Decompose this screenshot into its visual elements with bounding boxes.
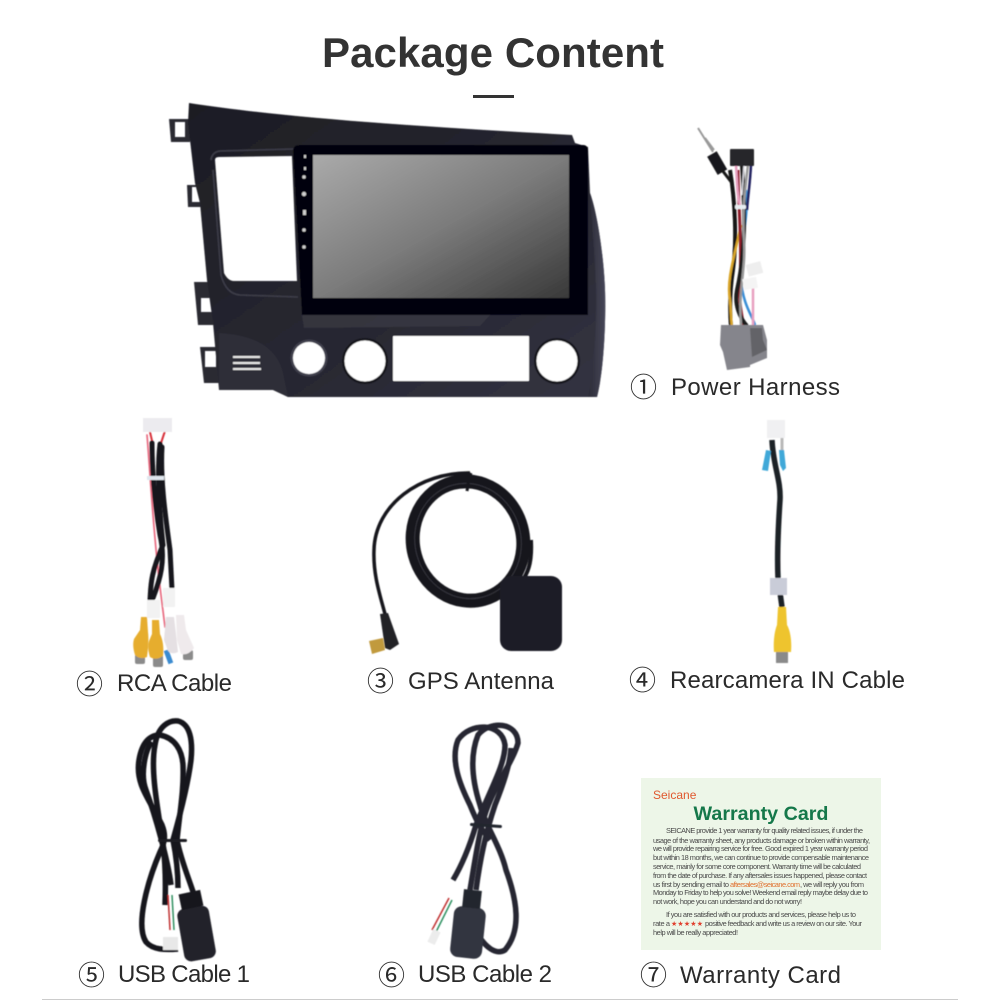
cable loops [453, 725, 518, 952]
warranty body text: SEICANE provide 1 year warranty for quality related issues, if under the [666, 826, 863, 835]
warranty body text: If you are satisfied with our products and services, please help us to [666, 910, 856, 919]
vent slots [233, 357, 261, 369]
top black plug [730, 149, 754, 166]
wire harness [147, 431, 172, 627]
blue tip [164, 649, 173, 664]
warranty body text: , we will reply you from [800, 880, 864, 889]
warranty body text: from the date of purchase. If any aftersales issues happened, please contact [653, 871, 867, 880]
touch key icons [302, 155, 306, 249]
label [770, 578, 787, 595]
label: power harness: ① [630, 366, 657, 405]
label: GPS antenna [367, 660, 555, 699]
title underline [473, 95, 514, 98]
white pin connector [143, 418, 172, 432]
white pin connector [427, 929, 441, 945]
label: rearcamera IN cable: ④ [629, 659, 656, 698]
label: USB cable 1 [78, 954, 250, 993]
tie [147, 476, 164, 480]
exposed wires [432, 898, 449, 930]
warranty body text: rate a [653, 919, 671, 928]
wire bundle [729, 165, 755, 328]
warranty body text: ★★★★★ [671, 920, 703, 928]
warranty body text: but within 18 months, we can continue to provide compensable maintenance [653, 853, 869, 862]
warranty body text: positive feedback and write us a review on our site. Your [705, 919, 863, 928]
label: RCA cable: ② [76, 663, 103, 702]
label: USB cable 2: USB Cable 2 [418, 961, 552, 988]
metal tips [135, 654, 145, 664]
image: rearcamera cable [762, 420, 791, 663]
card heading: Warranty Card [694, 803, 828, 825]
warranty body text: usage of the warranty sheet, any products damage or broken within warranty, [653, 836, 870, 845]
wire tags [746, 261, 763, 277]
image: GPS antenna [369, 461, 562, 654]
image: RCA cable [133, 418, 194, 667]
warranty body text: Monday to Friday to help you solve! Weekend email reply maybe delay due to [653, 888, 868, 897]
warranty body text: us first by sending email to [653, 880, 729, 889]
label: power harness [630, 366, 840, 405]
white RCA plugs [164, 617, 178, 653]
yellow plug [774, 607, 791, 652]
label: warranty card: Warranty Card [680, 962, 841, 989]
cable tie [467, 473, 471, 491]
label: GPS antenna: GPS Antenna [408, 668, 555, 695]
label: warranty card [640, 954, 841, 993]
warranty body text: not work, hope you can understand and do not worry! [653, 897, 802, 906]
warranty body text [652, 826, 870, 937]
bezel shadow band [302, 315, 490, 328]
label: USB cable 2 [378, 954, 552, 993]
white labels [147, 600, 160, 618]
label: rearcamera IN cable: Rearcamera IN Cable [670, 667, 905, 694]
label: GPS antenna: ③ [367, 660, 394, 699]
warranty body text: we will provide repairing service for free. Good expired 1 year warranty period [652, 844, 868, 853]
fascia body [188, 103, 605, 397]
wire tie [158, 839, 187, 842]
label: USB cable 2: ⑥ [378, 954, 405, 993]
cable loops [138, 721, 198, 949]
grey connectors [720, 325, 767, 370]
label: USB cable 1: ⑤ [78, 954, 105, 993]
grey wire [780, 437, 784, 452]
feed to puck [524, 540, 531, 578]
label: USB cable 1: USB Cable 1 [118, 961, 250, 988]
panel: head unit radio fascia [169, 103, 605, 397]
white pin connector [163, 937, 178, 950]
cable coil [391, 461, 545, 621]
window rim [211, 149, 298, 297]
panel: warranty card [641, 778, 881, 950]
cable tail [374, 473, 470, 614]
SMA connector body [380, 613, 399, 650]
image: USB cable 2 [427, 725, 518, 960]
brand name: Seicane [653, 788, 697, 802]
image: power harness [698, 128, 767, 370]
right side panel highlight [588, 193, 605, 397]
wire tie [470, 823, 502, 828]
gold SMA tip [369, 638, 385, 654]
wire tie [735, 205, 746, 209]
mounting brackets [169, 119, 221, 383]
white connector [767, 420, 785, 438]
label: warranty card: ⑦ [640, 954, 667, 993]
label: RCA cable [76, 663, 232, 702]
display screen [313, 155, 569, 298]
screen bezel [293, 145, 588, 315]
warranty body text: help will be really appreciated! [653, 928, 738, 937]
cable [772, 440, 782, 607]
antenna plug [698, 128, 732, 183]
climate control band [219, 333, 288, 397]
title: Package Content [322, 29, 664, 76]
label: rearcamera IN cable [629, 659, 905, 698]
warranty body text: aftersales@seicane.com [730, 880, 800, 889]
exposed wires [168, 895, 170, 930]
strain relief [179, 890, 203, 910]
USB socket [176, 905, 217, 962]
metal tip [776, 652, 788, 663]
USB socket [449, 905, 487, 960]
strain relief [462, 889, 482, 909]
label: RCA cable: RCA Cable [117, 670, 232, 697]
warranty body text: service, mainly for some core component. Warranty time will be calculated [653, 862, 861, 871]
card background [641, 778, 881, 950]
round knob holes [290, 340, 328, 376]
yellow RCA plugs [133, 617, 148, 658]
antenna puck [500, 576, 562, 651]
image: USB cable 1 [138, 721, 217, 962]
blue insulators [762, 450, 771, 471]
label: power harness: Power Harness [671, 374, 840, 401]
